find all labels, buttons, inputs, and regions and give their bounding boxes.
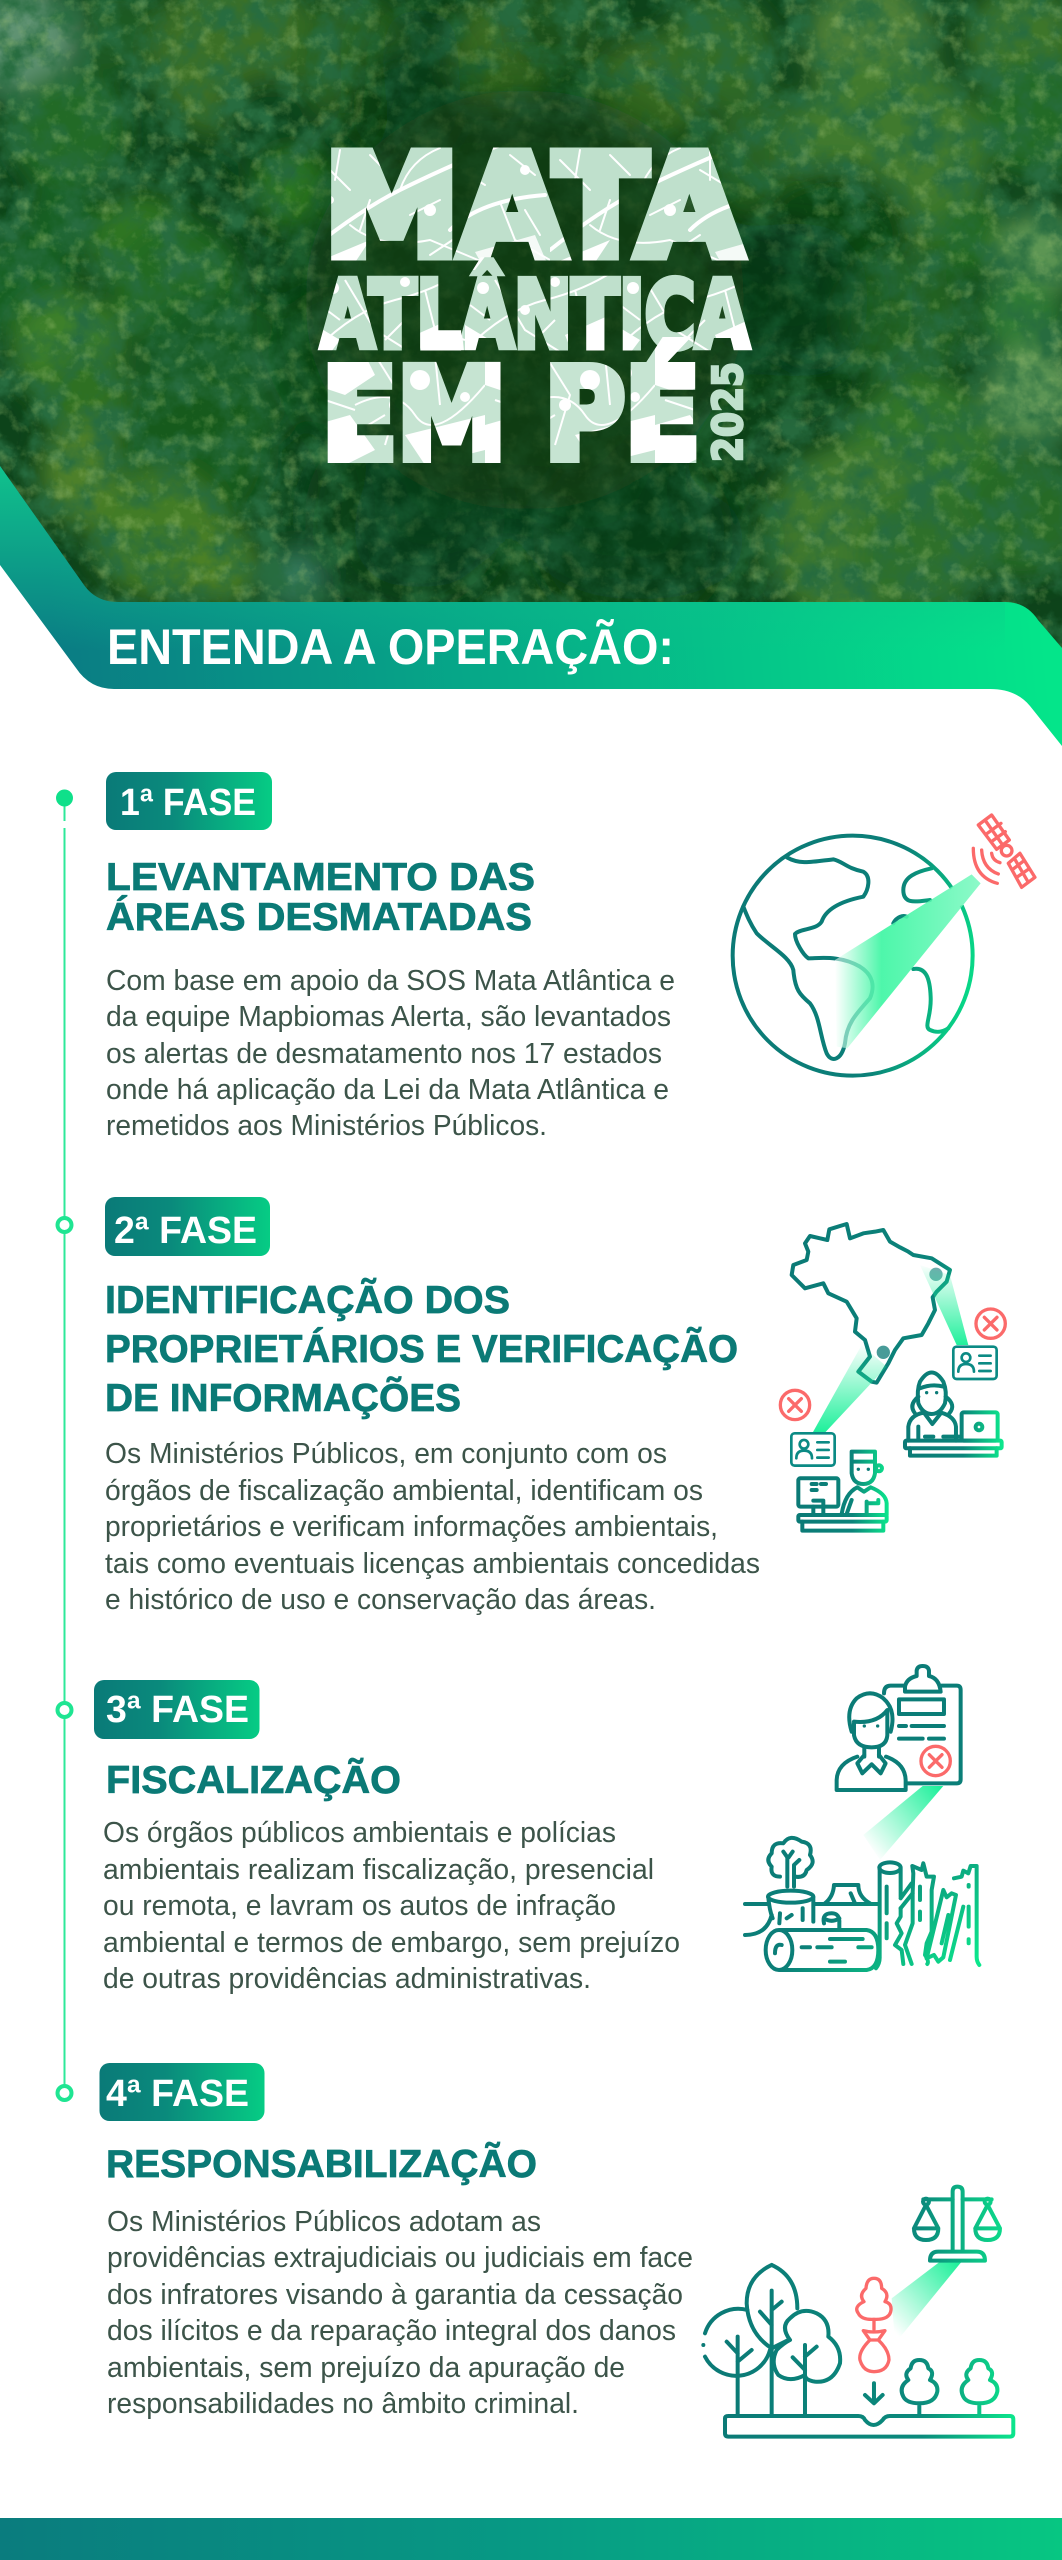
title: Mata Atlântica em Pé 2025: EM PÉ <box>322 342 700 488</box>
band heading: Entenda a operação: ENTENDA A OPERAÇÃO: <box>107 619 674 675</box>
phase 3 body text: ambientais realizam fiscalização, presencial <box>103 1854 654 1886</box>
phase 3 heading: FISCALIZAÇÃO <box>106 1758 401 1802</box>
forest aerial background <box>0 0 1062 700</box>
phase 2 badge <box>105 1197 270 1256</box>
title: Mata Atlântica em Pé 2025: MATA <box>324 126 742 289</box>
phase 1 heading: ÁREAS DESMATADAS <box>106 895 532 939</box>
phase 1 body text: da equipe Mapbiomas Alerta, são levantados <box>106 1001 671 1033</box>
icon: Brazil map with landowners <box>780 1224 1005 1531</box>
phase 3 body text: Os órgãos públicos ambientais e polícias <box>103 1817 616 1849</box>
phase 3 body text <box>103 1817 680 1995</box>
phase 4 body text <box>107 2206 693 2420</box>
icon: scales of justice and forest restoration <box>701 2187 1013 2437</box>
phase 3 body text: ambiental e termos de embargo, sem prejuízo <box>103 1927 680 1959</box>
phase 1 body text: remetidos aos Ministérios Públicos. <box>106 1110 547 1142</box>
phase 1 body text <box>106 965 675 1142</box>
phase 3 body text: de outras providências administrativas. <box>103 1963 591 1995</box>
title: Mata Atlântica em Pé 2025: 2025 <box>704 362 752 462</box>
phase 3 badge <box>94 1680 260 1739</box>
footer bar <box>0 2518 1062 2560</box>
phase 1 badge <box>106 772 272 830</box>
phase 4 body text: ambientais, sem prejuízo da apuração de <box>107 2352 625 2384</box>
phase 1 body text: os alertas de desmatamento nos 17 estados <box>106 1038 662 1070</box>
phase 1 panel <box>106 772 1035 1142</box>
phase 2 heading: PROPRIETÁRIOS E VERIFICAÇÃO <box>105 1327 738 1371</box>
phase 4 badge <box>100 2063 264 2121</box>
phase 1 body text: Com base em apoio da SOS Mata Atlântica e <box>106 965 675 997</box>
phase 2 body text <box>105 1438 760 1616</box>
phase 2 body text: proprietários e verificam informações ambientais, <box>105 1511 718 1543</box>
phase 2 heading: DE INFORMAÇÕES <box>105 1376 461 1420</box>
icon: globe with satellite <box>733 815 1035 1076</box>
title: Mata Atlântica em Pé 2025 <box>321 126 752 488</box>
phase 2 body text: Os Ministérios Públicos, em conjunto com os <box>105 1438 667 1470</box>
phase 4 body text: dos ilícitos e da reparação integral dos danos <box>107 2315 676 2347</box>
phase 1 heading: LEVANTAMENTO DAS <box>106 856 535 899</box>
timeline <box>56 790 73 2100</box>
title: Mata Atlântica em Pé 2025: ATLÂNTICA <box>321 261 749 369</box>
phase 4 panel <box>100 2063 1013 2437</box>
phase 1 heading <box>106 856 535 939</box>
phase 3 badge: 3ª FASE <box>106 1689 249 1731</box>
phase 4 body text: responsabilidades no âmbito criminal. <box>107 2388 579 2420</box>
heading band shape <box>0 466 1062 760</box>
icon: inspector with clipboard over felled trees <box>745 1666 979 1970</box>
phase 2 panel <box>105 1197 1005 1616</box>
phase 1 badge: 1ª FASE <box>120 782 256 824</box>
white content panel <box>0 565 1062 2560</box>
phase 4 body text: dos infratores visando à garantia da cessação <box>107 2279 683 2311</box>
phase 2 badge: 2ª FASE <box>114 1210 257 1252</box>
phase 2 heading: IDENTIFICAÇÃO DOS <box>105 1278 510 1322</box>
phase 4 heading: RESPONSABILIZAÇÃO <box>106 2142 537 2186</box>
phase 3 panel <box>94 1666 979 1995</box>
phase 3 body text: ou remota, e lavram os autos de infração <box>103 1890 616 1922</box>
phase 4 body text: Os Ministérios Públicos adotam as <box>107 2206 541 2238</box>
phase 2 body text: tais como eventuais licenças ambientais concedidas <box>105 1548 760 1580</box>
phase 2 heading <box>105 1278 738 1420</box>
phase 2 body text: órgãos de fiscalização ambiental, identificam os <box>105 1475 703 1507</box>
phase 1 body text: onde há aplicação da Lei da Mata Atlântica e <box>106 1074 669 1106</box>
phase 4 badge: 4ª FASE <box>106 2073 249 2115</box>
phase 2 body text: e histórico de uso e conservação das áreas. <box>105 1584 656 1616</box>
phase 4 body text: providências extrajudiciais ou judiciais em face <box>107 2242 693 2274</box>
